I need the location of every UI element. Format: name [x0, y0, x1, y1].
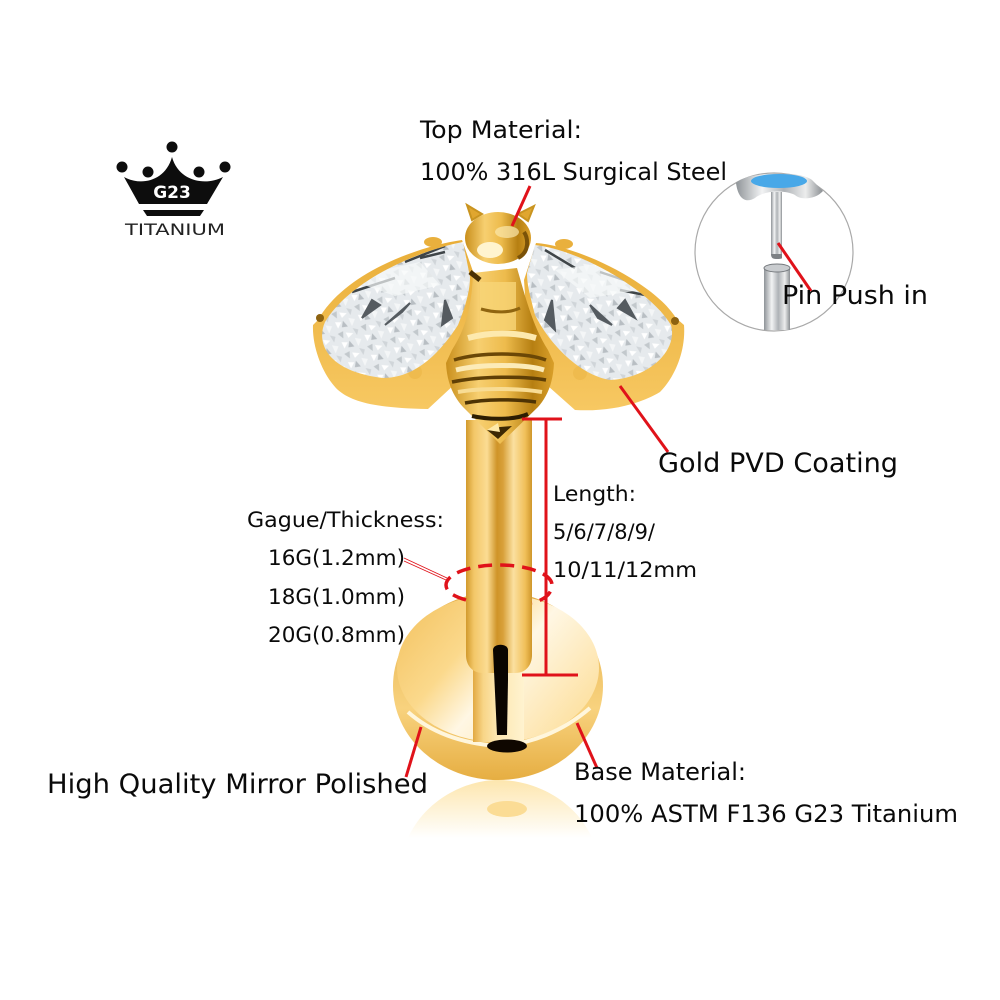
label: mirror polished: High Quality Mirror Polished — [47, 769, 428, 800]
label: gold PVD coating: Gold PVD Coating — [658, 448, 898, 479]
base disc — [393, 592, 603, 780]
label: length options: Length: — [553, 482, 636, 506]
label: length options — [553, 482, 697, 582]
bee: right crystal wing — [527, 245, 672, 380]
leader line: mirror polished — [406, 727, 421, 777]
leader line: base material — [577, 723, 597, 768]
bee: gold wing settings — [313, 237, 684, 410]
reflection below disc — [408, 780, 592, 838]
label: gauge options: 18G(1.0mm) — [268, 585, 405, 609]
bee: left crystal wing — [322, 242, 470, 378]
gauge double leader line — [404, 558, 447, 580]
post stem — [466, 420, 532, 752]
inset: pin push in detail — [695, 173, 853, 331]
logo: G23 titanium crown: TITANIUM — [124, 220, 225, 239]
label: gauge options: Gague/Thickness: — [247, 508, 444, 532]
gauge dashed ring — [446, 565, 552, 603]
label: base material: 100% ASTM F136 G23 Titanium — [574, 800, 958, 828]
label: top material: 100% 316L Surgical Steel — [420, 158, 727, 186]
label: length options: 5/6/7/8/9/ — [553, 520, 656, 544]
leader line: top material — [512, 186, 530, 226]
label: pin push in: Pin Push in — [782, 281, 928, 311]
length dimension marker — [522, 419, 578, 676]
label: base material — [574, 758, 958, 828]
bee: body — [446, 205, 554, 444]
label: top material: Top Material: — [419, 116, 582, 144]
infographic canvas — [50, 120, 956, 832]
logo: G23 titanium crown — [116, 142, 230, 239]
label: length options: 10/11/12mm — [553, 558, 697, 582]
label: gauge options — [247, 508, 444, 647]
logo: G23 titanium crown: G23 — [153, 183, 191, 203]
label: gauge options: 20G(0.8mm) — [268, 623, 405, 647]
leader line: gold PVD coating — [620, 386, 668, 452]
label: top material — [419, 116, 727, 186]
label: gauge options: 16G(1.2mm) — [268, 546, 405, 570]
label: base material: Base Material: — [574, 758, 746, 786]
